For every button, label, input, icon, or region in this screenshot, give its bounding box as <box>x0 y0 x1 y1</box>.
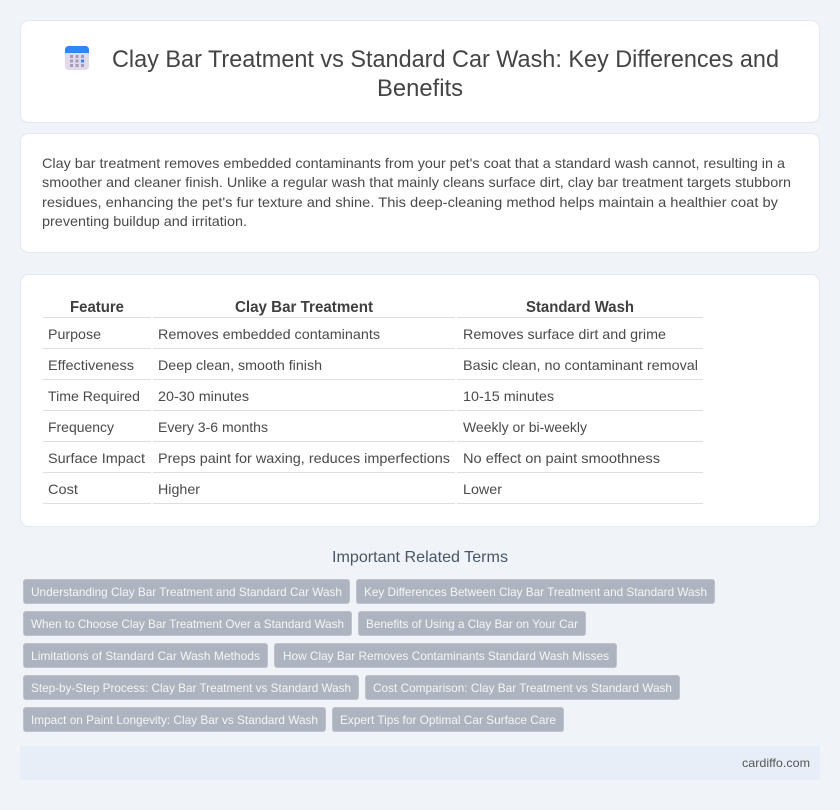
tag: Expert Tips for Optimal Car Surface Care <box>340 713 556 727</box>
table row: surface impact: Surface Impact <box>48 450 145 466</box>
related term tags <box>24 580 714 732</box>
table row: frequency: Weekly or bi-weekly <box>463 419 587 435</box>
footer bar <box>20 746 820 780</box>
panel: introduction text: Clay bar treatment removes embedded contaminants from your pet's coat that a standard wash cannot, resulting in a <box>42 155 785 171</box>
footer bar: cardiffo.com <box>742 756 810 770</box>
tag: Cost Comparison: Clay Bar Treatment vs Standard Wash <box>373 681 672 695</box>
tag: How Clay Bar Removes Contaminants Standard Wash Misses <box>283 649 609 663</box>
table row: purpose: Purpose <box>48 326 101 342</box>
table row: cost: Cost <box>48 481 78 497</box>
table header row <box>70 299 634 316</box>
tag <box>366 676 680 700</box>
panel: introduction text: smoother and cleaner finish. Unlike a regular wash that mainly cleans surface dirt, clay bar treatment targets stubborn <box>42 174 791 190</box>
table row: surface impact: No effect on paint smoothness <box>463 450 660 466</box>
table row: frequency: Frequency <box>48 419 114 435</box>
icon: calendar <box>65 46 89 70</box>
title <box>112 46 779 102</box>
tag: Key Differences Between Clay Bar Treatment and Standard Wash <box>364 585 707 599</box>
tag <box>24 580 350 604</box>
table header row: Clay Bar Treatment <box>235 299 374 316</box>
table row: effectiveness <box>48 357 698 373</box>
table row: effectiveness: Basic clean, no contaminant removal <box>463 357 698 373</box>
table row: time required: Time Required <box>48 388 140 404</box>
panel: introduction text: residues, enhancing the pet's fur texture and shine. This deep-cleaning method helps maintain a healthier coat by <box>42 194 778 210</box>
panel: introduction text <box>20 134 820 252</box>
table row: effectiveness: Deep clean, smooth finish <box>158 357 322 373</box>
table row: purpose: Removes embedded contaminants <box>158 326 380 342</box>
table row: surface impact <box>48 450 660 466</box>
tag <box>274 644 616 668</box>
table header row: Feature <box>70 299 124 316</box>
table row: effectiveness: Effectiveness <box>48 357 134 373</box>
table row: cost: Higher <box>158 481 200 497</box>
table row: cost <box>48 481 502 497</box>
tag: When to Choose Clay Bar Treatment Over a Standard Wash <box>31 617 344 631</box>
table row: purpose: Removes surface dirt and grime <box>463 326 666 342</box>
tag: Limitations of Standard Car Wash Methods <box>31 649 260 663</box>
panel: comparison table <box>20 274 820 526</box>
panel: introduction text: preventing buildup and irritation. <box>42 213 247 229</box>
tag <box>356 580 714 604</box>
title: Benefits <box>377 75 463 102</box>
panel: title header <box>20 20 820 122</box>
table row: time required: 20-30 minutes <box>158 388 249 404</box>
table row: purpose <box>48 326 666 342</box>
tag: Benefits of Using a Clay Bar on Your Car <box>366 617 578 631</box>
table header row: Standard Wash <box>526 299 634 316</box>
table row: cost: Lower <box>463 481 502 497</box>
table row: frequency: Every 3-6 months <box>158 419 268 435</box>
table row: surface impact: Preps paint for waxing, reduces imperfections <box>158 450 450 466</box>
title: Clay Bar Treatment vs Standard Car Wash: Key Differences and <box>112 46 779 73</box>
tag <box>24 612 352 636</box>
tag <box>24 644 268 668</box>
table row: frequency <box>48 419 587 435</box>
tag: Understanding Clay Bar Treatment and Standard Car Wash <box>31 585 342 599</box>
table row: time required <box>48 388 554 404</box>
tag: Step-by-Step Process: Clay Bar Treatment vs Standard Wash <box>31 681 351 695</box>
tag: Impact on Paint Longevity: Clay Bar vs Standard Wash <box>31 713 318 727</box>
table row: time required: 10-15 minutes <box>463 388 554 404</box>
tag <box>24 708 326 732</box>
heading: important related terms: Important Related Terms <box>332 549 508 566</box>
tag <box>358 612 586 636</box>
tag <box>24 676 358 700</box>
tag <box>332 708 564 732</box>
